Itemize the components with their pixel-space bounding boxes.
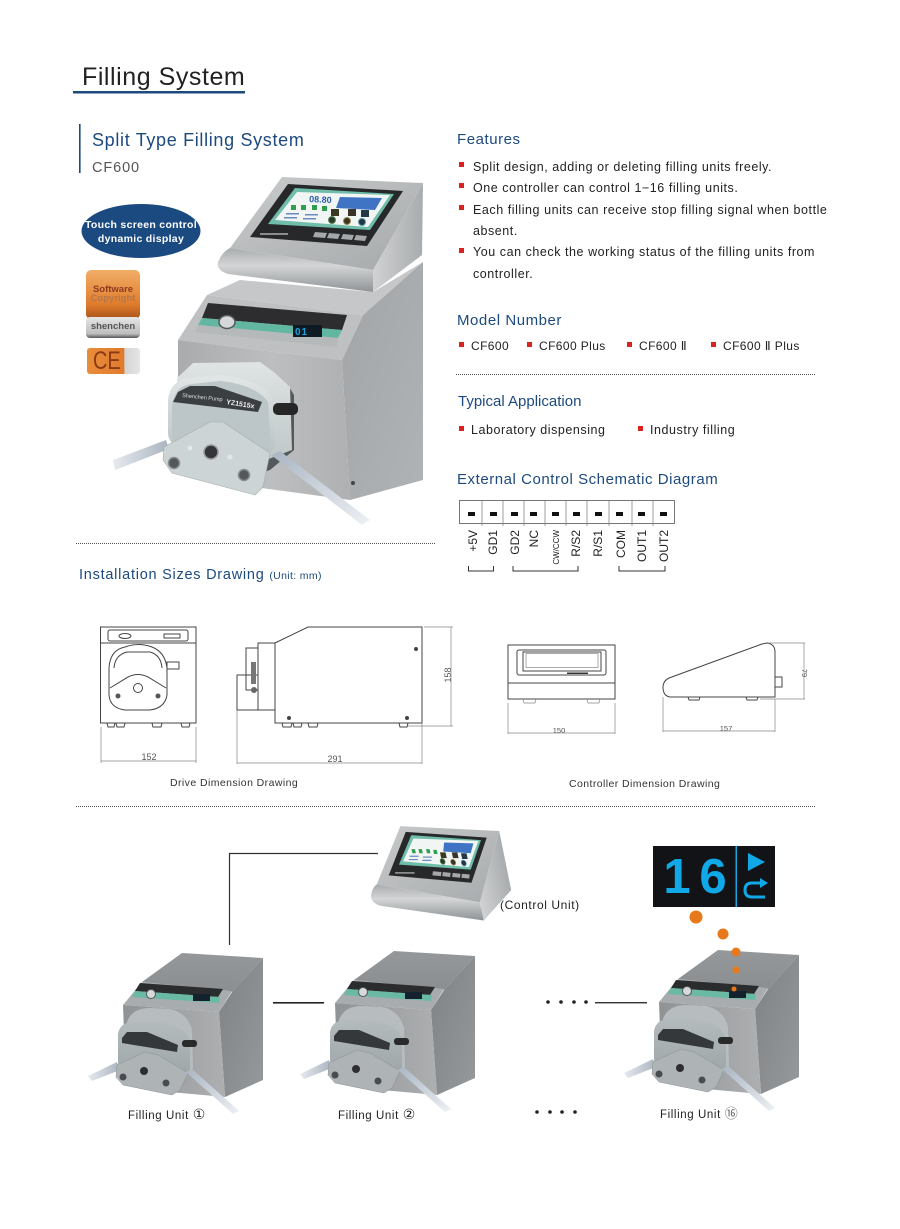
drive front view: 152 bbox=[141, 752, 157, 762]
badge: CE bbox=[87, 347, 140, 375]
controller side view bbox=[663, 643, 809, 733]
installation sizes heading: Installation Sizes Drawing (Unit: mm) bbox=[79, 567, 322, 583]
caption: controller: Controller Dimension Drawing bbox=[569, 778, 720, 790]
features: Split design, adding or deleting filling units freely. bbox=[473, 160, 772, 174]
schematic diagram: GD1 bbox=[486, 530, 500, 555]
product heading bbox=[79, 124, 304, 176]
badge: CE: CE bbox=[93, 347, 121, 375]
schematic diagram: CW/CCW bbox=[552, 530, 561, 565]
features: Each filling units can receive stop filling signal when bottle bbox=[473, 203, 827, 217]
caption: drive: Drive Dimension Drawing bbox=[170, 777, 298, 789]
features bbox=[457, 131, 827, 281]
controller side view: 79 bbox=[800, 669, 809, 677]
model number bbox=[457, 312, 800, 353]
badge: software copyright: Software bbox=[93, 284, 133, 295]
filling unit 16 bbox=[624, 950, 799, 1111]
product photo: controller and drive bbox=[113, 177, 423, 525]
display callout: 6 bbox=[699, 850, 727, 904]
typical application bbox=[458, 393, 735, 437]
link: to unit 16 bbox=[595, 1002, 647, 1003]
link dots bbox=[546, 1000, 588, 1004]
unit labels: Filling Unit ① bbox=[128, 1106, 206, 1122]
drive body: 01 bbox=[295, 327, 308, 338]
schematic diagram bbox=[460, 500, 674, 571]
features: controller. bbox=[473, 267, 533, 281]
unit labels: Filling Unit ⑯ bbox=[660, 1106, 738, 1121]
typical application: Laboratory dispensing bbox=[471, 423, 606, 437]
pump head: Shenchen Pump bbox=[182, 393, 223, 403]
drive side view bbox=[237, 627, 453, 764]
drive body bbox=[178, 262, 423, 500]
badge: software copyright bbox=[86, 270, 140, 338]
typical application: Typical Application bbox=[458, 393, 581, 410]
features: absent. bbox=[473, 224, 518, 238]
pump head bbox=[163, 362, 298, 495]
schematic diagram: +5V bbox=[466, 530, 480, 552]
product heading: CF600 bbox=[92, 160, 140, 176]
model number: CF600 bbox=[471, 339, 509, 353]
display callout: 1 bbox=[663, 850, 691, 904]
controller front view: 150 bbox=[553, 726, 565, 735]
model number: CF600 Plus bbox=[539, 339, 606, 353]
connection line: controller to unit 1 bbox=[230, 854, 378, 945]
controller front view bbox=[508, 645, 615, 735]
tube right bbox=[271, 451, 370, 525]
badge: software copyright: shenchen bbox=[91, 321, 135, 332]
signal dots bbox=[690, 910, 740, 992]
tube left bbox=[113, 440, 169, 470]
callout: touch screen: Touch screen control bbox=[85, 219, 197, 231]
schematic diagram: NC bbox=[527, 530, 541, 547]
lower link dots bbox=[535, 1110, 577, 1114]
drive side view: 158 bbox=[443, 667, 453, 683]
model number: CF600 Ⅱ bbox=[639, 339, 687, 353]
badge: software copyright: Copyright bbox=[91, 293, 136, 304]
title: Filling System bbox=[82, 63, 245, 91]
filling unit 2 bbox=[300, 951, 475, 1112]
schematic diagram: COM bbox=[614, 530, 628, 558]
callout: touch screen: dynamic display bbox=[98, 233, 184, 245]
typical application: Industry filling bbox=[650, 423, 735, 437]
control unit bbox=[356, 826, 518, 920]
link: unit 1 to unit 2 bbox=[273, 1002, 324, 1004]
model number: CF600 Ⅱ Plus bbox=[723, 339, 800, 353]
control unit label: (Control Unit) bbox=[500, 898, 580, 912]
controller bbox=[218, 177, 423, 292]
unit labels bbox=[128, 1106, 738, 1122]
filling unit 1 bbox=[88, 953, 263, 1114]
external control schematic heading: External Control Schematic Diagram bbox=[457, 471, 718, 488]
schematic diagram: OUT2 bbox=[657, 530, 671, 562]
model number: Model Number bbox=[457, 312, 562, 329]
display callout bbox=[653, 846, 775, 907]
drive front view bbox=[100, 627, 196, 763]
schematic diagram: R/S2 bbox=[569, 530, 583, 557]
unit labels: Filling Unit ② bbox=[338, 1106, 416, 1122]
schematic diagram: GD2 bbox=[508, 530, 522, 555]
drive side view: 291 bbox=[327, 754, 343, 764]
schematic diagram: R/S1 bbox=[591, 530, 605, 557]
features: One controller can control 1−16 filling units. bbox=[473, 181, 738, 195]
features: Features bbox=[457, 131, 521, 148]
screen readout: 08.80 bbox=[309, 194, 332, 205]
callout: touch screen bbox=[82, 204, 200, 258]
schematic diagram: OUT1 bbox=[635, 530, 649, 562]
controller side view: 157 bbox=[720, 724, 732, 733]
product heading: Split Type Filling System bbox=[92, 130, 304, 150]
features: You can check the working status of the filling units from bbox=[473, 245, 815, 259]
pump head: YZ1515x bbox=[226, 399, 255, 410]
